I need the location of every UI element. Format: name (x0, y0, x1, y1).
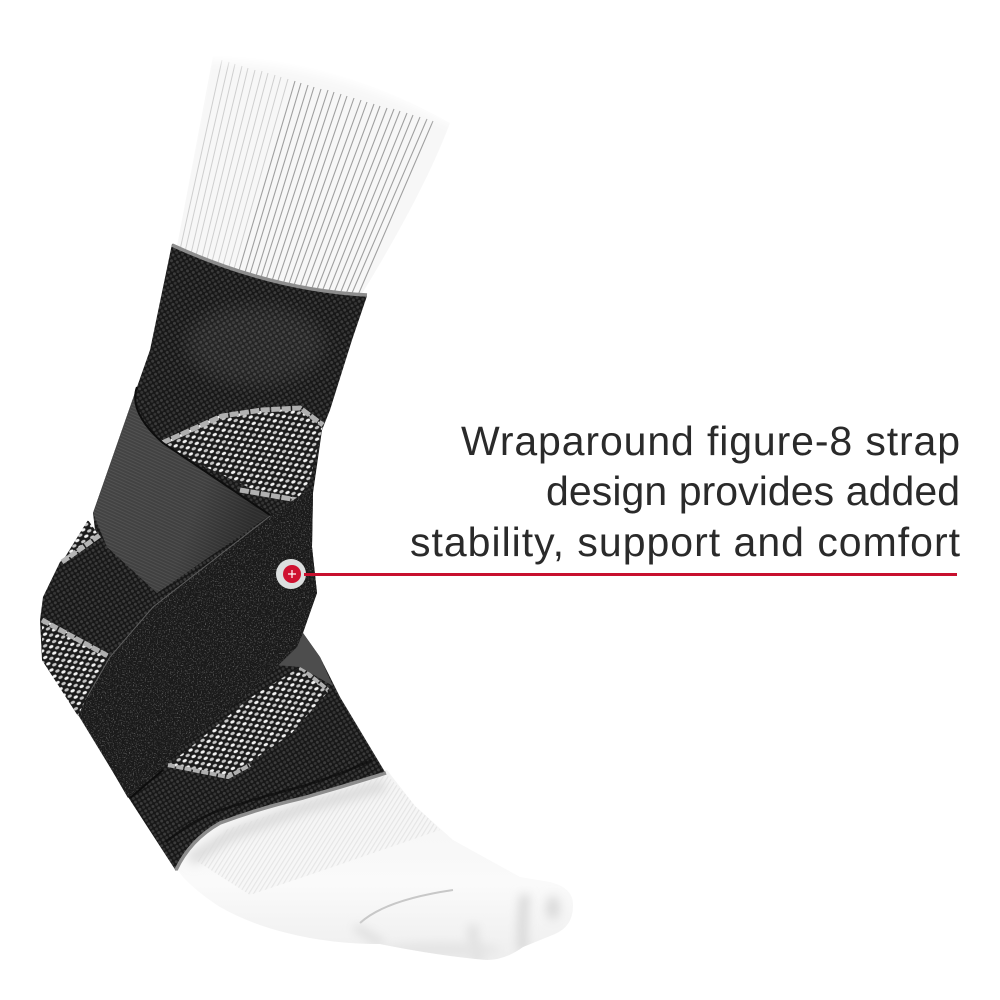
black knit sleeve (40, 244, 386, 871)
ankle brace product illustration (40, 48, 573, 962)
lower front dotted panel (168, 667, 328, 777)
small heel dotted panel (62, 520, 100, 562)
sleeve bottom hem (176, 773, 386, 870)
foot white sock with toes (170, 770, 573, 962)
callout marker (276, 559, 306, 589)
textured hook-and-loop strap (80, 490, 317, 798)
callout text (410, 418, 961, 565)
sleeve top hem (172, 245, 367, 295)
callout text: stability, support and comfort (410, 519, 961, 565)
gray elastic strap (93, 387, 270, 593)
upper dotted knit panel (162, 408, 323, 500)
callout leader line (304, 573, 957, 576)
callout text: design provides added (546, 468, 960, 514)
gray ankle wedge (275, 633, 333, 686)
callout text: Wraparound figure-8 strap (461, 418, 960, 464)
lower heel dotted panel (42, 618, 110, 716)
upper white sock with ribbing (172, 48, 462, 316)
